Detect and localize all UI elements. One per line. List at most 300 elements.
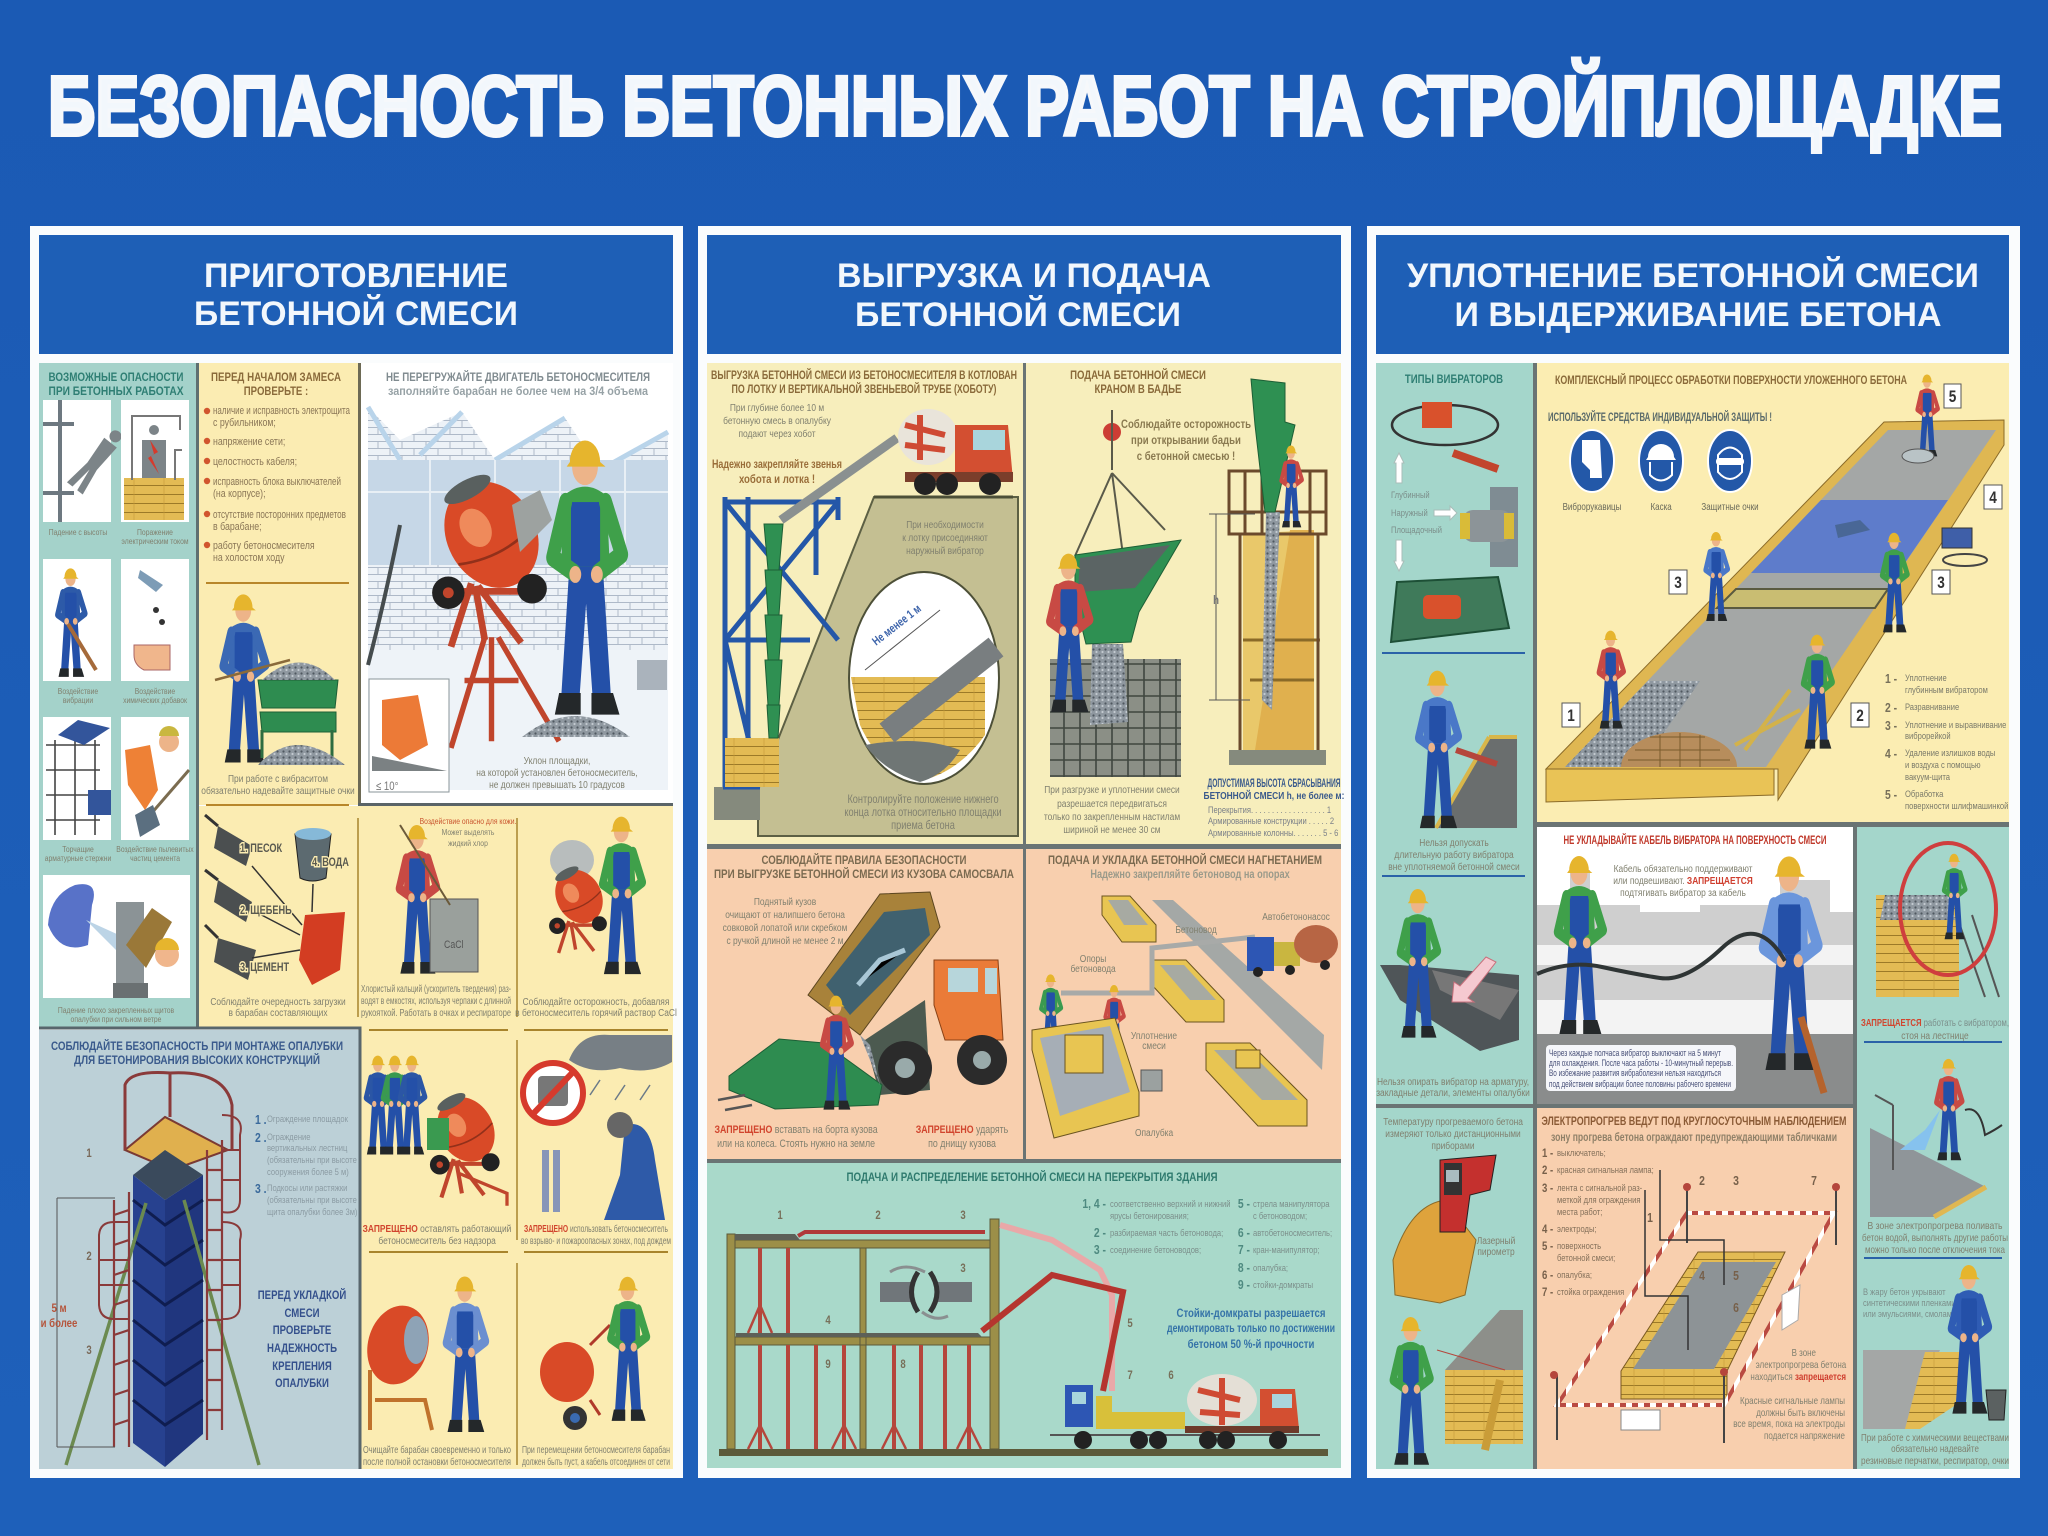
high tower delivery — [1209, 379, 1326, 765]
diagram numbers: 2 — [875, 1209, 881, 1222]
surface treatment process: Каска — [1650, 501, 1673, 512]
check formwork note: НАДЕЖНОСТЬ — [267, 1342, 337, 1355]
vibrator column: вне уплотняемой бетонной смеси — [1388, 861, 1520, 873]
moving the mixer — [540, 1277, 647, 1430]
chute delivery: Контролируйте положение нижнего — [847, 794, 999, 806]
surface treatment process: ИСПОЛЬЗУЙТЕ СРЕДСТВА ИНДИВИДУАЛЬНОЙ ЗАЩИТЫ ! — [1548, 409, 1772, 424]
chute delivery: хобота и лотка ! — [739, 473, 815, 486]
pre-mix checklist column: целостность кабеля; — [213, 456, 297, 468]
formwork legend: сооружения более 5 м) — [267, 1166, 349, 1177]
prop removal note: Стойки-домкраты разрешается — [1177, 1307, 1325, 1320]
hazards column: опалубки при сильном ветре — [71, 1014, 161, 1024]
chute delivery: При необходимости — [906, 519, 984, 531]
panel 3 heading: УПЛОТНЕНИЕ БЕТОННОЙ СМЕСИ — [1407, 256, 1979, 295]
floor delivery legend: 3 - — [1094, 1243, 1106, 1257]
formwork legend: Подкосы или растяжки — [267, 1182, 348, 1193]
yellow safety rules area: Соблюдайте очередность загрузки — [210, 996, 346, 1008]
pre-mix checklist column: наличие и исправность электрощита — [213, 405, 351, 417]
hazards column: Падение с высоты — [49, 527, 107, 537]
dump truck unloading: по днищу кузова — [928, 1138, 996, 1150]
temperature column — [1376, 1108, 1533, 1469]
diagram numbers: 1 — [777, 1209, 783, 1222]
electric heating: 5 — [1733, 1269, 1739, 1283]
heating zone warning: должны быть включены — [1756, 1407, 1845, 1418]
pre-mix checklist column: (на корпусе); — [213, 488, 266, 500]
calcium chloride dilution: жидкий хлор — [448, 838, 488, 848]
hot solution adding — [545, 817, 642, 974]
pre-mix checklist column: ПРОВЕРЬТЕ : — [244, 385, 308, 398]
safety right column: резиновые перчатки, респиратор, очки — [1861, 1455, 2009, 1467]
step markers: 2 — [1856, 707, 1864, 725]
pumped concrete: Опалубка — [1135, 1127, 1174, 1139]
hazards column: Воздействие пылевитых — [116, 844, 194, 854]
panel 1 heading: ПРИГОТОВЛЕНИЕ — [204, 257, 508, 295]
chute delivery: подают через хобот — [738, 428, 816, 440]
concrete mixer — [424, 460, 559, 748]
panel 1 heading — [39, 235, 673, 354]
heating legend: бетонной смеси; — [1557, 1252, 1615, 1263]
electric heating: 4 — [1699, 1269, 1705, 1283]
diagram numbers: 7 — [1127, 1369, 1133, 1382]
floor delivery legend: 7 - — [1238, 1243, 1250, 1257]
yellow safety rules area: Хлористый кальций (ускоритель твердения) раз- — [361, 983, 511, 995]
pre-mix checklist column: в барабане; — [213, 521, 262, 533]
temperature reading — [1393, 1310, 1523, 1465]
overload warning scene: не должен превышать 10 градусов — [489, 779, 625, 791]
process legend: 2 - — [1885, 701, 1897, 715]
pre-mix checklist column: с рубильником; — [213, 417, 276, 429]
formwork section: 2 — [86, 1250, 92, 1263]
cable warning scene: НЕ УКЛАДЫВАЙТЕ КАБЕЛЬ ВИБРАТОРА НА ПОВЕРХНОСТЬ СМЕСИ — [1564, 832, 1826, 847]
vibrator column: ТИПЫ ВИБРАТОРОВ — [1405, 373, 1503, 386]
yellow safety rules area: бетоносмеситель без надзора — [378, 1235, 496, 1247]
pumped concrete: смеси — [1142, 1040, 1166, 1052]
electric heating: 1 — [1647, 1211, 1653, 1225]
safety right column: ЗАПРЕЩАЕТСЯ работать с вибратором, — [1861, 1017, 2009, 1029]
floor delivery legend — [1082, 1197, 1332, 1292]
slope inset: ≤ 10° — [376, 780, 398, 793]
pre-mix checklist column — [199, 363, 361, 805]
heating legend: лента с сигнальной раз- — [1557, 1182, 1642, 1193]
overload warning scene: Уклон площадки, — [524, 755, 590, 767]
floor delivery legend: кран-манипулятор; — [1253, 1244, 1320, 1255]
step markers: 3 — [1937, 574, 1945, 592]
high tower delivery: h — [1213, 594, 1219, 607]
vibrating worker — [1419, 671, 1517, 828]
step markers: 3 — [1674, 574, 1682, 592]
PPE icons — [1570, 430, 1752, 492]
dump truck unloading: Поднятый кузов — [754, 896, 816, 908]
formwork tower — [66, 1072, 259, 1467]
diagram numbers: 5 — [1127, 1317, 1133, 1330]
calcium chloride dilution: CaCl — [444, 939, 464, 951]
hazard: electric shock — [121, 400, 189, 522]
temperature column: приборами — [1431, 1140, 1475, 1152]
slab with stages — [1546, 420, 2004, 802]
vibrator column: Нельзя опирать вибратор на арматуру, — [1377, 1076, 1529, 1088]
coupling icon — [880, 1267, 972, 1318]
floor delivery legend: 8 - — [1238, 1261, 1250, 1275]
unattended mixer warning — [366, 1056, 507, 1206]
vacuum pump — [1942, 528, 1987, 566]
prop removal note: бетоном 50 %-й прочности — [1188, 1338, 1314, 1351]
formwork legend: Ограждение площадок — [267, 1113, 348, 1124]
operating breaks note: Через каждые полчаса вибратор выключают на 5 минут — [1549, 1048, 1721, 1058]
temperature column: Температуру прогреваемого бетона — [1383, 1116, 1524, 1128]
crane hook and bucket — [1075, 410, 1181, 644]
hazards column: химических добавок — [123, 695, 188, 705]
heating legend: поверхность — [1557, 1240, 1602, 1251]
panel 1 heading: БЕТОННОЙ СМЕСИ — [194, 294, 518, 333]
process legend: виброрейкой — [1905, 730, 1951, 741]
formwork boxes — [1102, 896, 1307, 1126]
dump truck unloading: ЗАПРЕЩЕНО вставать на борта кузова — [715, 1124, 878, 1136]
platform vibrator — [1391, 577, 1509, 642]
prop removal note — [1167, 1307, 1335, 1351]
diagram numbers: 3 — [960, 1209, 966, 1222]
temperature column: Лазерный — [1477, 1235, 1515, 1247]
watering warning — [1870, 1059, 2002, 1217]
yellow safety rules area: Соблюдайте осторожность, добавляя — [523, 996, 669, 1008]
formwork legend: вертикальных лестниц — [267, 1142, 347, 1153]
hazards column: Торчащие — [62, 844, 94, 854]
hazard: cement dust — [121, 717, 189, 840]
heating zone warning: находиться запрещается — [1750, 1371, 1846, 1382]
hazards column: Падение плохо закрепленных щитов — [58, 1005, 174, 1015]
process legend: вакуум-щита — [1905, 771, 1950, 782]
chute delivery: бетонную смесь в опалубку — [723, 415, 831, 427]
heating legend: электроды; — [1557, 1223, 1597, 1234]
heating legend: стойка ограждения — [1557, 1286, 1624, 1297]
check formwork note: СМЕСИ — [285, 1307, 320, 1320]
safety right column — [1857, 827, 2009, 1469]
slope inset — [369, 679, 449, 793]
laser pyrometer — [1393, 1155, 1496, 1303]
yellow safety rules area — [199, 805, 677, 1469]
heating legend: 7 - — [1542, 1286, 1554, 1299]
truck cab — [934, 960, 1003, 1040]
operating breaks note: Во избежание развития вибраболезни нельзя находиться — [1549, 1068, 1721, 1078]
floor delivery legend: 5 - — [1238, 1197, 1250, 1211]
process legend: глубинным вибратором — [1905, 684, 1988, 695]
panel: concrete mix preparation — [30, 226, 683, 1478]
process legend: Удаление излишков воды — [1905, 747, 1995, 758]
step markers — [1562, 384, 2002, 727]
hazard: wind — [43, 875, 190, 998]
yellow safety rules area: после полной остановки бетоносмесителя — [363, 1456, 511, 1468]
cable warning scene: подтягивать вибратор за кабель — [1620, 887, 1746, 899]
hazard: fall from height — [43, 400, 127, 522]
safety right column: стоя на лестнице — [1901, 1030, 1969, 1042]
yellow safety rules area: водят в емкостях, используя черпаки с длинной — [361, 995, 511, 1007]
surface treatment process — [1537, 363, 2009, 822]
yellow safety rules area: должен быть пуст, а кабель отсоединен от сети — [522, 1456, 670, 1468]
electric heating: 7 — [1811, 1174, 1817, 1188]
pre-mix checklist column: напряжение сети; — [213, 436, 285, 448]
dump body — [718, 892, 1007, 1110]
floor delivery legend: 9 - — [1238, 1278, 1250, 1292]
heating legend: места работ; — [1557, 1206, 1602, 1217]
hazard: chemicals — [121, 559, 189, 681]
drop height table: БЕТОННОЙ СМЕСИ h, не более м: — [1204, 789, 1344, 802]
heating legend: 6 - — [1542, 1269, 1554, 1282]
drop height table: Перекрытия. . . . . . . . . . . . . . . . . . 1 — [1208, 804, 1331, 815]
electric heating: 2 — [1699, 1174, 1705, 1188]
mixer truck — [898, 409, 1013, 495]
formwork legend: (обязательны при высоте — [267, 1154, 357, 1165]
safety right column: В зоне электропрогрева поливать — [1868, 1220, 2003, 1232]
hazards column: Поражение — [137, 527, 173, 537]
safety right column: обязательно надевайте — [1891, 1443, 1979, 1454]
pumped concrete: Надежно закрепляйте бетоновод на опорах — [1090, 868, 1290, 881]
temperature column: измеряют только дистанционными — [1385, 1128, 1521, 1140]
diagram numbers: 9 — [825, 1358, 831, 1371]
pumped concrete: Бетоновод — [1175, 924, 1217, 936]
yellow safety rules area: ЗАПРЕЩЕНО оставлять работающий — [363, 1223, 511, 1235]
pumped concrete: бетоновода — [1070, 963, 1116, 975]
hazards column: арматурные стержни — [45, 853, 111, 863]
calcium chloride dilution: Может выделять — [442, 827, 494, 837]
floor delivery legend: стрела манипулятора — [1253, 1198, 1330, 1209]
chute delivery: При глубине более 10 м — [730, 402, 824, 414]
operating breaks note: для охлаждения. После часа работы - 10-минутный перерыв. — [1549, 1058, 1733, 1068]
cable warning scene — [1537, 827, 1853, 1104]
overload warning scene: на которой установлен бетоносмеситель, — [476, 767, 638, 779]
diagram numbers: 3 — [960, 1262, 966, 1275]
inset: chute end — [849, 572, 999, 784]
overload warning scene: НЕ ПЕРЕГРУЖАЙТЕ ДВИГАТЕЛЬ БЕТОНОСМЕСИТЕЛЯ — [386, 369, 650, 384]
pump and mixer trucks — [1050, 1374, 1320, 1449]
floor delivery legend: опалубка; — [1253, 1262, 1288, 1273]
floor delivery: ПОДАЧА И РАСПРЕДЕЛЕНИЕ БЕТОННОЙ СМЕСИ НА ПЕРЕКРЫТИЯ ЗДАНИЯ — [846, 1169, 1218, 1184]
process legend: 4 - — [1885, 747, 1897, 761]
hazard: rebar — [43, 717, 111, 840]
yellow safety rules area: При перемещении бетоносмесителя барабан — [522, 1444, 670, 1456]
chute delivery: конца лотка относительно площадки — [844, 807, 1002, 819]
loading order diagram: 1. ПЕСОК — [240, 843, 283, 855]
large formwork — [1032, 1018, 1139, 1138]
check formwork note — [258, 1288, 346, 1390]
heating legend: 5 - — [1542, 1240, 1554, 1253]
check formwork note: ПРОВЕРЬТЕ — [273, 1324, 331, 1337]
pre-mix checklist column: на холостом ходу — [213, 552, 285, 564]
process legend: поверхности шлифмашинкой — [1905, 800, 2008, 811]
panel 2 heading: ВЫГРУЗКА И ПОДАЧА — [837, 257, 1211, 295]
formwork legend: 1 . — [255, 1113, 267, 1127]
chute delivery: приема бетона — [891, 819, 955, 832]
yellow safety rules area: рукояткой. Работать в очках и респираторе — [361, 1007, 511, 1019]
process legend: 1 - — [1885, 672, 1897, 686]
pre-mix checklist column: работу бетоносмесителя — [213, 540, 315, 552]
process legend — [1885, 672, 2008, 811]
dump truck unloading: с ручкой длиной не менее 2 м — [726, 935, 844, 947]
heating legend: 3 - — [1542, 1182, 1554, 1195]
formwork section: СОБЛЮДАЙТЕ БЕЗОПАСНОСТЬ ПРИ МОНТАЖЕ ОПАЛУБКИ — [51, 1038, 343, 1053]
panel 2 heading: БЕТОННОЙ СМЕСИ — [855, 295, 1181, 334]
process legend: и воздуха с помощью — [1905, 759, 1981, 770]
formwork section: 5 м — [51, 1302, 67, 1315]
electric heating: зону прогрева бетона ограждают предупреждающими табличками — [1551, 1130, 1837, 1144]
loading order diagram: 2. ЩЕБЕНЬ — [240, 905, 292, 917]
rebar and concrete — [1050, 659, 1181, 777]
process legend: 5 - — [1885, 788, 1897, 802]
pre-mix checklist column: ПЕРЕД НАЧАЛОМ ЗАМЕСА — [211, 370, 341, 384]
pre-mix checklist column: отсутствие посторонних предметов — [213, 509, 346, 521]
process legend: 3 - — [1885, 719, 1897, 733]
pumped concrete: Автобетононасос — [1262, 911, 1330, 923]
calcium chloride dilution: Воздействие опасно для кожи. — [420, 816, 516, 826]
heating legend: меткой для ограждения — [1557, 1194, 1641, 1205]
heating zone warning: В зоне — [1792, 1347, 1816, 1358]
crane bucket delivery: при открывании бадьи — [1131, 434, 1241, 447]
crane bucket delivery — [1024, 363, 1344, 844]
pre-mix checklist column: При работе с вибраситом — [228, 773, 328, 785]
check formwork note: ОПАЛУБКИ — [275, 1377, 329, 1390]
dump truck unloading: совковой лопатой или скребком — [723, 922, 847, 934]
heating zone warning — [1733, 1347, 1847, 1441]
pumped concrete: Уплотнение — [1131, 1030, 1177, 1042]
crane bucket delivery: с бетонной смесью ! — [1137, 450, 1235, 463]
heating legend: опалубка; — [1557, 1269, 1592, 1280]
electric heating — [1537, 1108, 1853, 1469]
hazards column: частиц цемента — [130, 853, 181, 863]
process legend: Уплотнение — [1905, 672, 1947, 683]
loading order diagram — [205, 815, 349, 985]
cable warning scene: или подвешивают. ЗАПРЕЩАЕТСЯ — [1613, 875, 1753, 887]
chute delivery: Надежно закрепляйте звенья — [712, 457, 842, 471]
workers on slab — [1599, 375, 1938, 750]
dump truck unloading: СОБЛЮДАЙТЕ ПРАВИЛА БЕЗОПАСНОСТИ — [762, 852, 966, 867]
hazards column: электрическим током — [121, 536, 189, 546]
electric heating: 3 — [1733, 1174, 1739, 1188]
dump truck unloading: или на колеса. Стоять нужно на земле — [717, 1138, 875, 1150]
overload warning scene — [361, 363, 673, 805]
operating breaks note: под действием вибрации более половины рабочего времени — [1549, 1079, 1731, 1089]
heating zone warning: все время, пока на электроды — [1733, 1418, 1845, 1429]
heating zone warning: подается напряжение — [1764, 1430, 1845, 1441]
heating legend: 4 - — [1542, 1223, 1554, 1236]
pump truck — [1247, 925, 1338, 977]
formwork legend: 3 . — [255, 1182, 267, 1196]
chute delivery: наружный вибратор — [906, 545, 984, 557]
heating legend: красная сигнальная лампа; — [1557, 1164, 1654, 1175]
diagram numbers: 6 — [1168, 1369, 1174, 1382]
sieve worker illustration — [215, 594, 345, 765]
chute delivery: к лотку присоединяют — [902, 532, 988, 544]
diagram numbers: 8 — [900, 1358, 906, 1371]
surface treatment process: КОМПЛЕКСНЫЙ ПРОЦЕСС ОБРАБОТКИ ПОВЕРХНОСТИ УЛОЖЕННОГО БЕТОНА — [1555, 372, 1907, 387]
diagram numbers: 4 — [825, 1314, 831, 1327]
panel 3 heading: И ВЫДЕРЖИВАНИЕ БЕТОНА — [1454, 296, 1942, 334]
formwork legend: Ограждение — [267, 1131, 311, 1142]
formwork legend — [255, 1113, 358, 1217]
no mixer in hazardous zones — [523, 1035, 672, 1220]
dump truck unloading: ЗАПРЕЩЕНО ударять — [916, 1124, 1008, 1136]
rebar warning — [1380, 889, 1519, 1051]
pre-mix checklist column: обязательно надевайте защитные очки — [201, 785, 355, 797]
floor delivery — [707, 1163, 1341, 1468]
temperature column: пирометр — [1477, 1246, 1515, 1258]
heating legend: 1 - — [1542, 1147, 1554, 1160]
formwork section: ДЛЯ БЕТОНИРОВАНИЯ ВЫСОКИХ КОНСТРУКЦИЙ — [74, 1052, 320, 1067]
floor delivery legend: стойки-домкраты — [1253, 1279, 1313, 1290]
vibrator column: длительную работу вибратора — [1394, 849, 1514, 861]
step markers: 5 — [1949, 388, 1957, 406]
curing note: или эмульсиями, смолами — [1863, 1308, 1956, 1319]
cleaning the drum — [359, 1276, 486, 1432]
crane bucket delivery: КРАНОМ В БАДЬЕ — [1095, 383, 1181, 396]
process legend: Разравнивание — [1905, 701, 1959, 712]
heating legend: 2 - — [1542, 1164, 1554, 1177]
hazards column: Воздействие — [135, 686, 175, 696]
drop height table: Армированные колонны. . . . . . . 5 - 6 — [1208, 827, 1338, 838]
crane bucket delivery: разрешается передвигаться — [1057, 798, 1167, 810]
dump truck unloading — [707, 849, 1023, 1159]
loading order diagram: 3. ЦЕМЕНТ — [240, 962, 290, 974]
vibrator column: Глубинный — [1391, 489, 1430, 500]
pre-mix checklist column: исправность блока выключателей — [213, 476, 341, 488]
direction arrows — [1394, 453, 1457, 571]
drop height table: ДОПУСТИМАЯ ВЫСОТА СБРАСЫВАНИЯ — [1208, 776, 1340, 790]
vibrator column: Наружный — [1391, 507, 1428, 518]
floor delivery legend: разбираемая часть бетоновода; — [1110, 1227, 1223, 1238]
yellow safety rules area: в бетоносмеситель горячий раствор CaCl — [515, 1007, 677, 1019]
check formwork note: ПЕРЕД УКЛАДКОЙ — [258, 1288, 346, 1302]
heating legend: выключатель; — [1557, 1147, 1606, 1158]
formwork section: 1 — [86, 1147, 92, 1160]
floor delivery legend: с бетоноводом; — [1253, 1210, 1307, 1221]
hazard: vibration — [43, 559, 111, 681]
operating breaks note — [1546, 1045, 1736, 1091]
surface treatment process: Защитные очки — [1701, 501, 1759, 512]
inset: chute end: Не менее 1 м — [869, 601, 924, 648]
floor delivery legend: автобетоносмеситель; — [1253, 1227, 1332, 1238]
chute delivery: ВЫГРУЗКА БЕТОННОЙ СМЕСИ ИЗ БЕТОНОСМЕСИТЕЛЯ В КОТЛОВАН — [711, 367, 1017, 382]
formwork legend: щита опалубки более 3м) — [267, 1206, 358, 1217]
curing note — [1863, 1286, 1956, 1319]
vibrator column: закладные детали, элементы опалубки — [1376, 1087, 1530, 1099]
panel 3 heading — [1376, 235, 2009, 354]
scaffold — [723, 497, 838, 787]
overload warning scene: заполняйте барабан не более чем на 3/4 объема — [388, 384, 648, 398]
formwork legend: 2 . — [255, 1131, 267, 1145]
panel: compaction and curing — [1367, 226, 2020, 1478]
crane bucket delivery: ПОДАЧА БЕТОННОЙ СМЕСИ — [1070, 368, 1206, 382]
heated slab diagram — [1550, 1170, 1840, 1443]
pumped concrete — [1026, 849, 1341, 1159]
process legend: Уплотнение и выравнивание — [1905, 719, 2007, 730]
safety right column: можно только после отключения тока — [1865, 1244, 2005, 1256]
heating legend — [1542, 1147, 1654, 1299]
deep vibrator — [1392, 402, 1498, 469]
vibrator column: Нельзя допускать — [1419, 837, 1489, 849]
pumped concrete: Опоры — [1080, 953, 1106, 965]
dump truck unloading: ПРИ ВЫГРУЗКЕ БЕТОННОЙ СМЕСИ ИЗ КУЗОВА САМОСВАЛА — [714, 866, 1014, 881]
vibrator column — [1376, 363, 1533, 1104]
drop height table — [1204, 776, 1344, 838]
yellow safety rules area: во взрыво- и пожароопасных зонах, под дождем — [521, 1235, 671, 1247]
diagram numbers — [777, 1209, 1174, 1382]
dump truck unloading: очищают от налипшего бетона — [725, 909, 846, 921]
heating zone warning: Красные сигнальные лампы — [1740, 1395, 1845, 1406]
vibrator column: Площадочный — [1391, 524, 1442, 535]
floor delivery legend: соответственно верхний и нижний — [1110, 1198, 1231, 1209]
yellow safety rules area: в барабан составляющих — [229, 1007, 328, 1019]
cable warning scene: Кабель обязательно поддерживают — [1614, 863, 1753, 875]
panel 2 heading — [707, 235, 1341, 354]
loading order diagram: 4. ВОДА — [312, 857, 349, 869]
panel: unloading and delivery — [698, 226, 1351, 1478]
